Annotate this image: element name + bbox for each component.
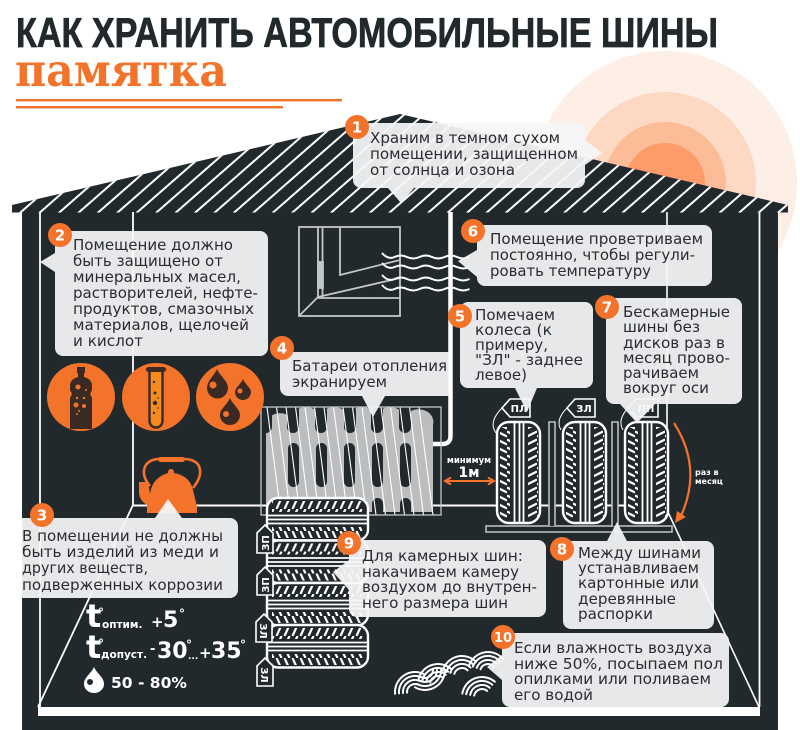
callout 1: от солнца и озона bbox=[370, 161, 515, 179]
callout 5 bbox=[448, 302, 593, 412]
callout 8: распорки bbox=[578, 605, 653, 623]
callout 5: Помечаем bbox=[475, 306, 555, 324]
room walls and floor bbox=[38, 212, 760, 707]
stats: temperature and humidity: ... bbox=[188, 652, 198, 662]
callout 9 bbox=[333, 531, 546, 617]
subtitle: памятка bbox=[15, 44, 227, 97]
callout 2 bbox=[40, 223, 268, 356]
callout 1 bbox=[345, 115, 602, 203]
stats: temperature and humidity: допуст. bbox=[101, 649, 147, 661]
callout 7: дисков раз в bbox=[623, 334, 725, 352]
upright tire tags: ПЛ bbox=[511, 404, 527, 415]
callout 7: Бескамерные bbox=[623, 303, 730, 321]
callout 4: 4 bbox=[277, 340, 287, 358]
callout 4 bbox=[270, 336, 449, 417]
minimum distance label: 1м bbox=[458, 465, 480, 481]
callout 9: воздухом до внутрен- bbox=[362, 578, 537, 596]
stack tire tags: ЗП bbox=[261, 535, 272, 551]
callout 3: В помещении не должны bbox=[22, 527, 223, 545]
callout 8: картонные или bbox=[578, 574, 699, 592]
callout 6 bbox=[458, 219, 712, 286]
upright tire tags bbox=[493, 399, 658, 433]
callout 9: него размера шин bbox=[362, 594, 508, 612]
roof bbox=[12, 114, 788, 212]
window bbox=[299, 227, 400, 316]
icon: sawdust bbox=[389, 649, 504, 699]
callout 3 bbox=[22, 499, 238, 598]
stack tire tags: ЗЛ bbox=[258, 667, 269, 683]
stats: temperature and humidity bbox=[84, 597, 246, 693]
icon: kettle bbox=[139, 457, 200, 513]
stats: temperature and humidity: ° bbox=[186, 638, 192, 652]
callout 3: быть изделий из меди и bbox=[22, 543, 219, 561]
heating pipe bbox=[430, 212, 450, 444]
callout 2: Помещение должно bbox=[73, 236, 233, 254]
callout 4: Батареи отопления bbox=[292, 357, 447, 375]
house body bbox=[22, 212, 778, 730]
callout 2: материалов, щелочей bbox=[73, 316, 249, 334]
icon: oil drops bbox=[196, 363, 264, 431]
stats: temperature and humidity: оптим. bbox=[102, 619, 142, 631]
callout 7: 7 bbox=[602, 298, 612, 316]
stack tire tags bbox=[256, 525, 273, 686]
callout 8: 8 bbox=[557, 540, 567, 558]
upright tire tags: ЗЛ bbox=[576, 404, 592, 415]
callout 5: левое) bbox=[475, 366, 527, 384]
callout 6: постоянно, чтобы регули- bbox=[490, 246, 695, 264]
callout 3: подверженных коррозии bbox=[22, 576, 223, 594]
callout 7 bbox=[595, 295, 742, 423]
callout 7: шины без bbox=[623, 318, 700, 336]
callout 5: 5 bbox=[455, 308, 465, 326]
tire stand bbox=[486, 422, 672, 532]
callout 7: вокруг оси bbox=[623, 379, 709, 397]
callout 2: продуктов, смазочных bbox=[73, 300, 254, 318]
tire stack bbox=[267, 498, 368, 668]
callout 10: ниже 50%, посыпаем пол bbox=[514, 655, 723, 673]
stats: temperature and humidity: ° bbox=[179, 607, 185, 621]
upright tires bbox=[497, 422, 668, 523]
callout 7: месяц прово- bbox=[623, 349, 730, 367]
stack tire tags: ЗЛ bbox=[257, 623, 268, 639]
stats: temperature and humidity: - bbox=[150, 642, 155, 657]
minimum distance label: минимум bbox=[447, 456, 491, 466]
callout 3: 3 bbox=[37, 506, 47, 524]
stats: temperature and humidity: 35 bbox=[211, 639, 242, 664]
callout 9: 9 bbox=[344, 534, 354, 552]
floor band bbox=[38, 707, 760, 716]
stats: temperature and humidity: 5 bbox=[163, 608, 178, 633]
rotation arrow bbox=[674, 423, 723, 523]
radiator with screen bbox=[260, 405, 441, 518]
stats: temperature and humidity: t bbox=[86, 597, 101, 635]
callout 10 bbox=[487, 625, 729, 707]
stack tire tags: ЗП bbox=[261, 577, 272, 593]
callout 9: Для камерных шин: bbox=[362, 547, 523, 565]
upright tire tags: ПП bbox=[638, 404, 654, 415]
stats: temperature and humidity: + bbox=[151, 613, 164, 631]
callout 6: Помещение проветриваем bbox=[490, 230, 703, 248]
callout 6: 6 bbox=[468, 222, 478, 240]
callout 5: "ЗЛ" - заднее bbox=[475, 351, 583, 369]
callout 6: ровать температуру bbox=[490, 262, 651, 280]
callout 4: экранируем bbox=[292, 373, 387, 391]
callout 2: и кислот bbox=[73, 332, 143, 350]
callout 10: Если влажность воздуха bbox=[514, 639, 712, 657]
callout 10: его водой bbox=[514, 686, 593, 704]
callout 1: помещении, защищенном bbox=[370, 145, 578, 163]
rotation arrow: раз в bbox=[695, 468, 719, 477]
callout 8 bbox=[550, 522, 714, 629]
icon: bottle bbox=[47, 363, 115, 431]
stats: temperature and humidity: 50 - 80% bbox=[111, 674, 187, 692]
stats: temperature and humidity: + bbox=[199, 644, 212, 662]
callout 10: 10 bbox=[494, 631, 512, 646]
stats: temperature and humidity: ° bbox=[98, 606, 104, 620]
title underlines bbox=[16, 99, 342, 108]
callout 9: накачиваем камеру bbox=[362, 563, 519, 581]
callout 2: растворителей, нефте- bbox=[73, 284, 258, 302]
callout 8: деревянные bbox=[578, 590, 676, 608]
callout 7: рачиваем bbox=[623, 364, 699, 382]
icon: sun bbox=[533, 51, 797, 315]
stats: temperature and humidity: t bbox=[86, 628, 101, 666]
icon: test tube bbox=[122, 363, 190, 431]
callout 8: Между шинами bbox=[578, 544, 701, 562]
stats: temperature and humidity: ° bbox=[240, 638, 246, 652]
callout 5: колеса (к bbox=[475, 321, 552, 339]
ventilation waves bbox=[382, 253, 470, 290]
rotation arrow: месяц bbox=[695, 477, 723, 486]
callout 10: опилками или поливаем bbox=[514, 670, 711, 688]
minimum distance label bbox=[445, 456, 494, 484]
callout 1: 1 bbox=[352, 118, 362, 136]
callout 8: устанавливаем bbox=[578, 559, 699, 577]
callout 1: Храним в темном сухом bbox=[370, 129, 560, 147]
callout 2: 2 bbox=[55, 226, 65, 244]
stats: temperature and humidity: 30 bbox=[157, 639, 188, 664]
callout 2: быть защищено от bbox=[73, 252, 223, 270]
callout 3: других веществ, bbox=[22, 559, 148, 577]
callout 2: минеральных масел, bbox=[73, 268, 241, 286]
callout 5: примеру, bbox=[475, 336, 548, 354]
stats: temperature and humidity: ° bbox=[98, 637, 104, 651]
